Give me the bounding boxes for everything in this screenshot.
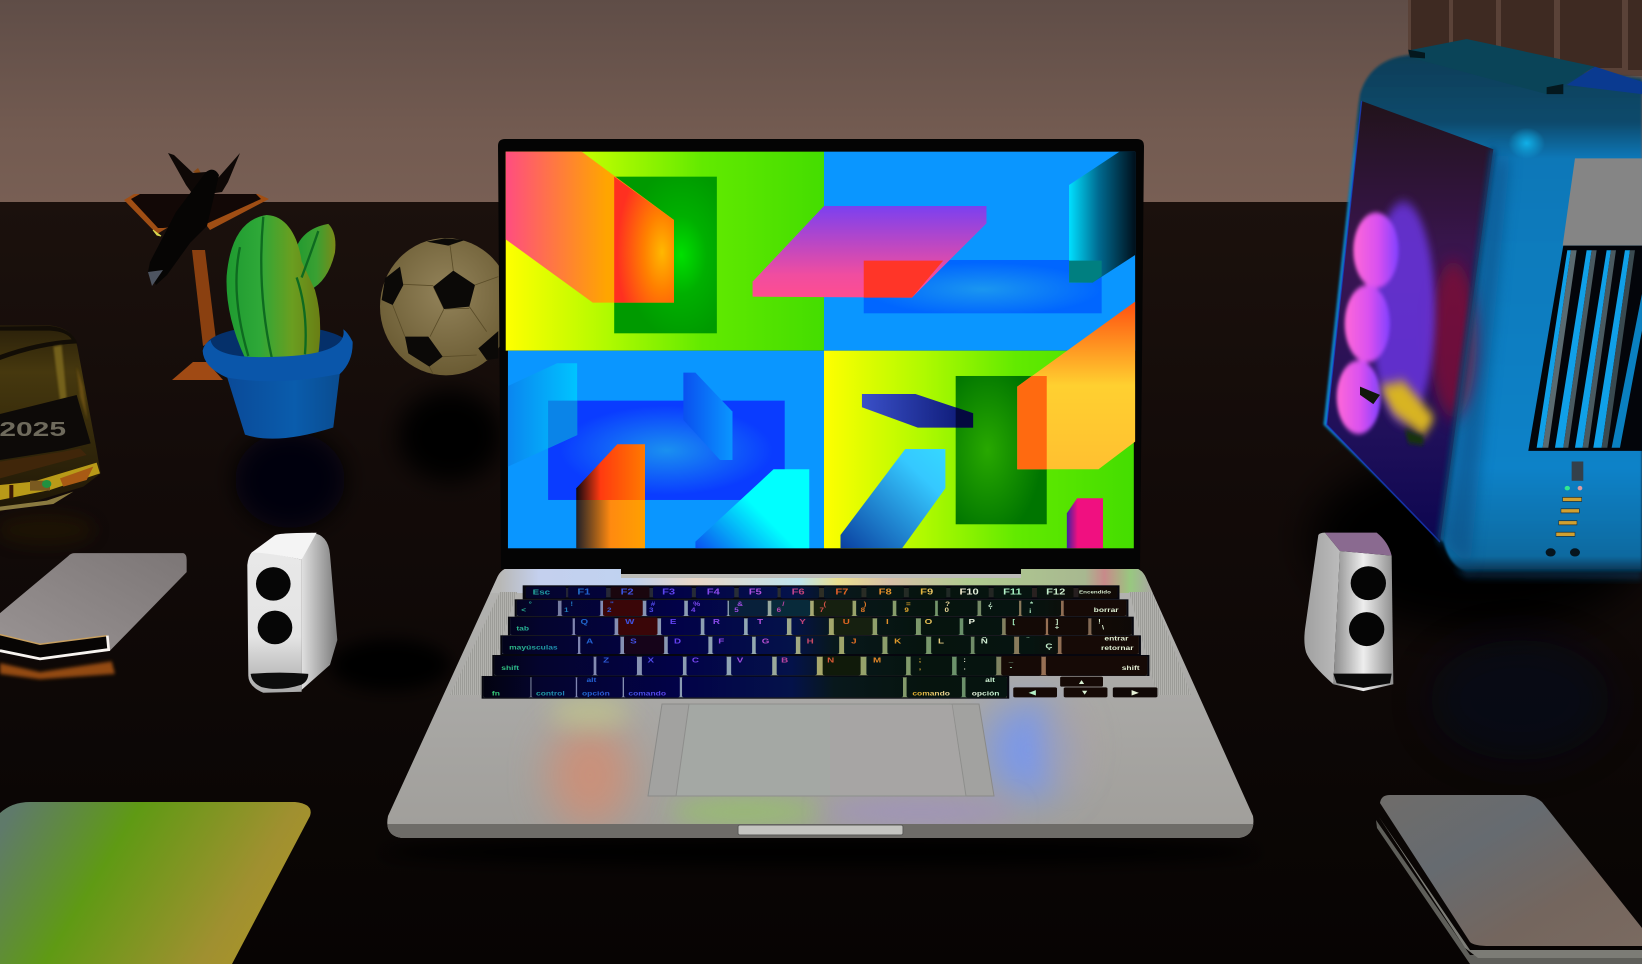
speaker bottom slot xyxy=(1333,674,1392,688)
key labels: ▲ xyxy=(1077,678,1086,686)
panel fan lights xyxy=(1337,213,1399,434)
device top face xyxy=(0,553,187,660)
device front dark recess xyxy=(0,635,109,658)
key labels: F5 xyxy=(749,588,762,597)
key labels: shift xyxy=(1122,664,1140,672)
bottom-left quadrant xyxy=(508,351,824,548)
key labels: W xyxy=(625,617,635,626)
key labels: P xyxy=(968,617,975,626)
lid bezel xyxy=(498,139,1144,574)
shelf top right xyxy=(1408,0,1642,76)
bottom-right quadrant xyxy=(824,302,1135,548)
key labels: F xyxy=(718,637,724,645)
panel red glow xyxy=(1430,262,1477,418)
ball pentagons xyxy=(382,238,498,367)
key labels: ◀ xyxy=(1028,689,1037,696)
key labels: mayúsculas xyxy=(509,643,558,651)
red top of column xyxy=(576,444,645,500)
glass rim shadow xyxy=(0,326,77,360)
year engraved on glass: 2025 xyxy=(0,418,66,441)
laptop base xyxy=(380,565,1260,838)
glass red and green reflections xyxy=(9,467,93,498)
key labels: % xyxy=(693,601,701,608)
key labels: S xyxy=(630,637,637,645)
stand foot xyxy=(172,362,223,380)
key labels: comando xyxy=(912,689,950,697)
key labels: T xyxy=(757,617,764,626)
cyan corner shape xyxy=(1069,152,1135,283)
key labels: L xyxy=(938,637,945,645)
key labels: 3 xyxy=(649,607,654,614)
jet tail fins xyxy=(168,153,240,196)
orange-red overlap xyxy=(1017,376,1047,469)
red-orange overlap xyxy=(614,177,674,303)
key labels: Ç xyxy=(1045,642,1053,650)
device upper light line xyxy=(0,635,107,644)
key labels: Z xyxy=(603,656,610,664)
mouse pad xyxy=(0,802,311,964)
key labels: Q xyxy=(580,617,588,626)
key labels: F2 xyxy=(621,588,634,597)
cactus arm xyxy=(293,224,335,290)
key labels: + xyxy=(1055,624,1059,631)
key labels: alt xyxy=(985,676,996,684)
key labels: E xyxy=(670,617,677,626)
key labels: 5 xyxy=(734,607,739,614)
right speaker xyxy=(1304,533,1393,691)
cactus in blue pot xyxy=(203,215,353,439)
screen lid xyxy=(498,139,1144,578)
key labels: 7 xyxy=(820,607,824,614)
key labels: G xyxy=(762,637,770,645)
tower body xyxy=(1323,55,1642,572)
key labels: Ñ xyxy=(981,637,988,645)
key labels: ' xyxy=(990,607,992,614)
key labels: ! xyxy=(570,601,573,608)
cobalt rectangle xyxy=(548,401,785,500)
desk surface xyxy=(0,202,1642,964)
key labels: ¡ xyxy=(1029,607,1032,614)
drinking glass xyxy=(0,325,101,512)
key labels: retornar xyxy=(1101,644,1134,652)
device lower light line xyxy=(0,636,109,659)
desk shadows and reflections xyxy=(0,390,1642,866)
jet wings orange frame xyxy=(124,194,269,234)
gaming pc tower xyxy=(1323,39,1642,580)
tower highlight xyxy=(1508,128,1545,159)
speaker drivers xyxy=(256,567,291,601)
key labels: V xyxy=(737,656,744,664)
soccer ball xyxy=(380,238,512,375)
key labels: tab xyxy=(516,625,530,632)
key labels: " xyxy=(610,601,614,608)
key labels: F10 xyxy=(959,588,979,597)
drive bay slots xyxy=(1556,497,1582,536)
jet wing light xyxy=(153,230,161,236)
key labels: / xyxy=(782,601,785,608)
silver slab device bottom right xyxy=(1376,795,1642,964)
speaker side xyxy=(302,533,337,690)
speaker front xyxy=(1333,551,1393,691)
key labels: F8 xyxy=(879,588,892,597)
panel left rim light xyxy=(1327,101,1440,542)
glass foot reflection xyxy=(0,492,73,511)
cactus ribs xyxy=(236,217,318,357)
speaker side xyxy=(1304,533,1340,684)
key labels: R xyxy=(713,617,721,626)
left speaker xyxy=(247,533,337,693)
key labels: U xyxy=(843,617,850,626)
key labels: J xyxy=(851,637,857,645)
key labels: < xyxy=(521,607,526,614)
key labels: 1 xyxy=(564,607,569,614)
key labels: Esc xyxy=(533,588,550,596)
key labels: Encendido xyxy=(1079,590,1112,595)
front ports xyxy=(1546,548,1580,557)
slanted blue shape xyxy=(841,449,945,548)
key labels: 4 xyxy=(691,607,696,614)
pot interior xyxy=(206,326,349,367)
teal overlap xyxy=(1069,261,1102,283)
middle thin shape xyxy=(683,373,732,460)
grey front panel xyxy=(1563,158,1642,246)
jet fuselage xyxy=(148,170,219,285)
key labels: F7 xyxy=(835,588,849,597)
key labels xyxy=(492,588,1140,697)
orange corner shape xyxy=(1017,302,1135,469)
right speaker grille xyxy=(1129,592,1191,695)
speaker drivers xyxy=(1351,566,1386,600)
stand pole xyxy=(192,250,216,346)
keys xyxy=(483,587,1157,697)
key labels: # xyxy=(651,601,655,608)
tower front shading strip xyxy=(1443,156,1510,567)
tower lid blue accent xyxy=(1567,67,1642,94)
key labels: ] xyxy=(1056,618,1058,625)
left speaker grille xyxy=(450,592,517,695)
panel to front blend xyxy=(1440,149,1493,542)
key labels: borrar xyxy=(1094,606,1119,614)
key labels: F6 xyxy=(792,588,805,597)
key labels: D xyxy=(674,637,681,645)
key labels: ! xyxy=(1098,618,1101,625)
key labels: 8 xyxy=(861,607,865,614)
key labels: A xyxy=(586,637,594,645)
key labels: fn xyxy=(492,689,500,697)
power slot xyxy=(1572,461,1583,481)
jet nose cone xyxy=(148,270,163,286)
key labels: ( xyxy=(824,601,827,608)
tower lid shadow ends xyxy=(1408,50,1563,94)
status LEDs xyxy=(1565,486,1582,490)
key labels: 9 xyxy=(904,607,909,614)
base iridescent reflections xyxy=(380,565,1260,838)
pot rim xyxy=(203,329,353,381)
key labels: shift xyxy=(501,664,520,672)
glass yellow base strip xyxy=(0,463,100,500)
key labels: 6 xyxy=(777,607,781,614)
violet parallelogram xyxy=(753,206,986,298)
key labels: O xyxy=(925,617,933,626)
key labels: F4 xyxy=(707,588,720,597)
keyboard xyxy=(482,585,1157,699)
tower soft bottom glow xyxy=(1453,569,1642,580)
key backlight gaps xyxy=(483,588,1147,697)
speaker top purple tint xyxy=(1325,533,1392,556)
vent grille xyxy=(1528,246,1642,451)
panel yellow light bar xyxy=(1380,381,1435,436)
glass warm lower zone xyxy=(0,448,87,478)
pink-orange shape xyxy=(506,152,674,303)
key labels: ¨ xyxy=(1027,637,1030,643)
navy shape xyxy=(862,394,973,428)
key labels: ; xyxy=(919,657,921,664)
key labels: [ xyxy=(1012,618,1016,625)
display artwork xyxy=(506,152,1135,548)
left cyan shape xyxy=(508,363,577,467)
key labels: . xyxy=(963,664,966,671)
key labels: 2 xyxy=(607,607,612,614)
key labels: opción xyxy=(972,689,1000,697)
jet tail tips xyxy=(193,168,230,176)
red overlap xyxy=(864,261,943,298)
key labels: K xyxy=(894,637,902,645)
top-left quadrant xyxy=(506,152,824,351)
key labels: F3 xyxy=(662,588,676,597)
key labels: ¿ xyxy=(988,601,993,608)
key labels: F11 xyxy=(1003,588,1022,597)
key labels: I xyxy=(886,617,889,626)
key labels: \ xyxy=(1102,624,1104,631)
wall background xyxy=(0,0,1642,203)
key labels: : xyxy=(963,657,966,664)
speaker bottom slot xyxy=(251,673,308,689)
model jet on stand xyxy=(124,153,269,380)
dark green rectangle xyxy=(956,376,1047,524)
key labels: control xyxy=(536,689,565,697)
key labels: alt xyxy=(586,676,597,684)
glass golden highlight xyxy=(53,345,67,400)
keyboard dark wells xyxy=(482,585,1149,699)
key labels: opción xyxy=(582,689,610,697)
hinge strip xyxy=(621,574,1021,578)
key labels: & xyxy=(737,601,743,608)
orange column xyxy=(576,500,645,548)
key labels: M xyxy=(873,656,881,664)
orange glow under device xyxy=(0,661,115,679)
cyan and cobalt overlap xyxy=(548,401,577,448)
key labels: ▼ xyxy=(1080,689,1089,696)
key labels: _ xyxy=(1008,656,1013,663)
key labels: ? xyxy=(945,601,950,608)
tower top lid xyxy=(1408,39,1595,94)
navy overlap xyxy=(956,407,973,428)
silver slab device left xyxy=(0,553,187,679)
key labels: N xyxy=(827,656,834,664)
jet wings dark face xyxy=(131,194,261,228)
green rectangle xyxy=(614,177,717,333)
laptop xyxy=(380,139,1260,838)
key labels: F1 xyxy=(577,588,591,597)
ball seams xyxy=(393,245,498,374)
key labels: F12 xyxy=(1046,588,1066,597)
top-right quadrant xyxy=(753,152,1135,351)
cyan bottom shape xyxy=(695,469,809,548)
key labels: F9 xyxy=(920,588,934,597)
key labels: H xyxy=(807,637,814,645)
glass label band xyxy=(0,395,91,460)
blue bar xyxy=(864,260,1102,313)
key labels: entrar xyxy=(1104,635,1128,642)
key labels: 0 xyxy=(945,607,949,614)
magenta shape xyxy=(1067,498,1103,548)
key labels: ▶ xyxy=(1131,689,1140,696)
front notch xyxy=(738,825,903,835)
key labels: comando xyxy=(628,689,667,697)
glass side panel xyxy=(1327,101,1493,542)
speaker top xyxy=(252,533,317,560)
key labels: Y xyxy=(799,617,806,626)
key labels: * xyxy=(1030,601,1033,608)
key labels: B xyxy=(781,656,788,664)
key labels: - xyxy=(1010,664,1013,671)
key labels: ` xyxy=(1012,624,1015,631)
pot body xyxy=(227,372,340,439)
key labels: ) xyxy=(864,601,866,608)
key labels: X xyxy=(648,656,654,664)
key labels: C xyxy=(692,656,700,664)
key labels: ° xyxy=(529,601,532,608)
glass side highlight xyxy=(77,367,87,420)
key labels: , xyxy=(919,664,921,671)
panel dark component xyxy=(1360,387,1380,404)
key labels: = xyxy=(906,601,911,608)
panel purple glow xyxy=(1372,202,1435,422)
glass body xyxy=(0,325,101,512)
speaker front xyxy=(247,552,302,693)
trackpad xyxy=(648,704,994,796)
cactus main body xyxy=(227,215,320,361)
